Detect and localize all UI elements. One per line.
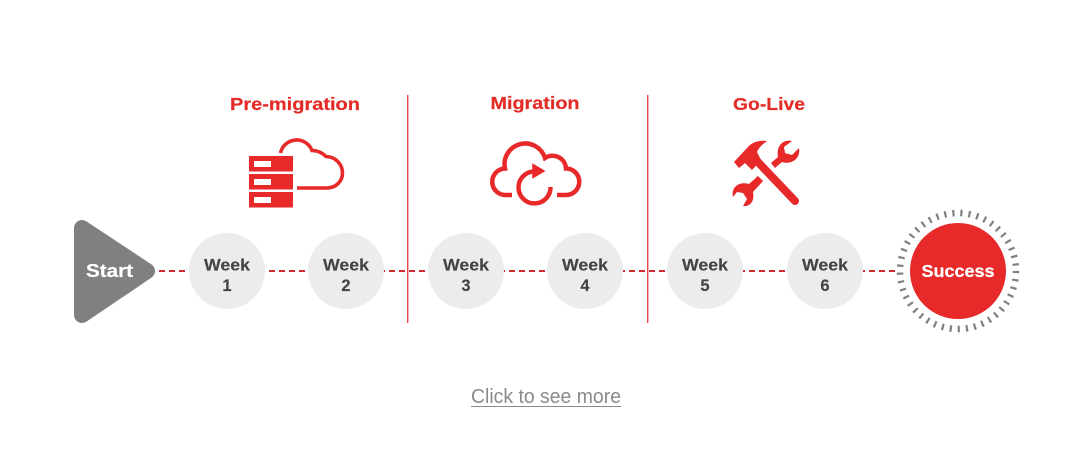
heading: Migration: Migration xyxy=(490,93,580,113)
week 1: Week xyxy=(204,256,251,274)
week 5: Week xyxy=(682,256,729,274)
icon: server and cloud xyxy=(249,140,342,208)
week 6: Week xyxy=(802,256,849,274)
dashed timeline connector xyxy=(159,270,905,272)
heading: Pre-migration: Pre-migration xyxy=(230,94,360,114)
week 1: 1 xyxy=(222,277,232,295)
week 4: 4 xyxy=(580,277,590,295)
week 6: 6 xyxy=(820,277,830,295)
link: click to see more: Click to see more xyxy=(471,386,621,408)
week 6 xyxy=(787,233,863,309)
week 2 xyxy=(308,233,384,309)
success marker: Success xyxy=(922,261,995,281)
week 2: 2 xyxy=(341,277,351,295)
week 5: 5 xyxy=(700,277,710,295)
week 1 xyxy=(189,233,265,309)
start marker: Start xyxy=(86,261,133,281)
success marker xyxy=(899,212,1017,330)
week 3: 3 xyxy=(461,277,471,295)
week 4: Week xyxy=(562,256,609,274)
heading: Go-Live: Go-Live xyxy=(733,94,805,114)
start marker xyxy=(82,228,147,315)
icon: crossed hammer and wrench xyxy=(733,141,799,206)
icon: cloud with refresh arrow xyxy=(492,143,579,203)
week 2: Week xyxy=(323,256,370,274)
week 3 xyxy=(428,233,504,309)
week 4 xyxy=(547,233,623,309)
week 5 xyxy=(667,233,743,309)
week 3: Week xyxy=(443,256,490,274)
